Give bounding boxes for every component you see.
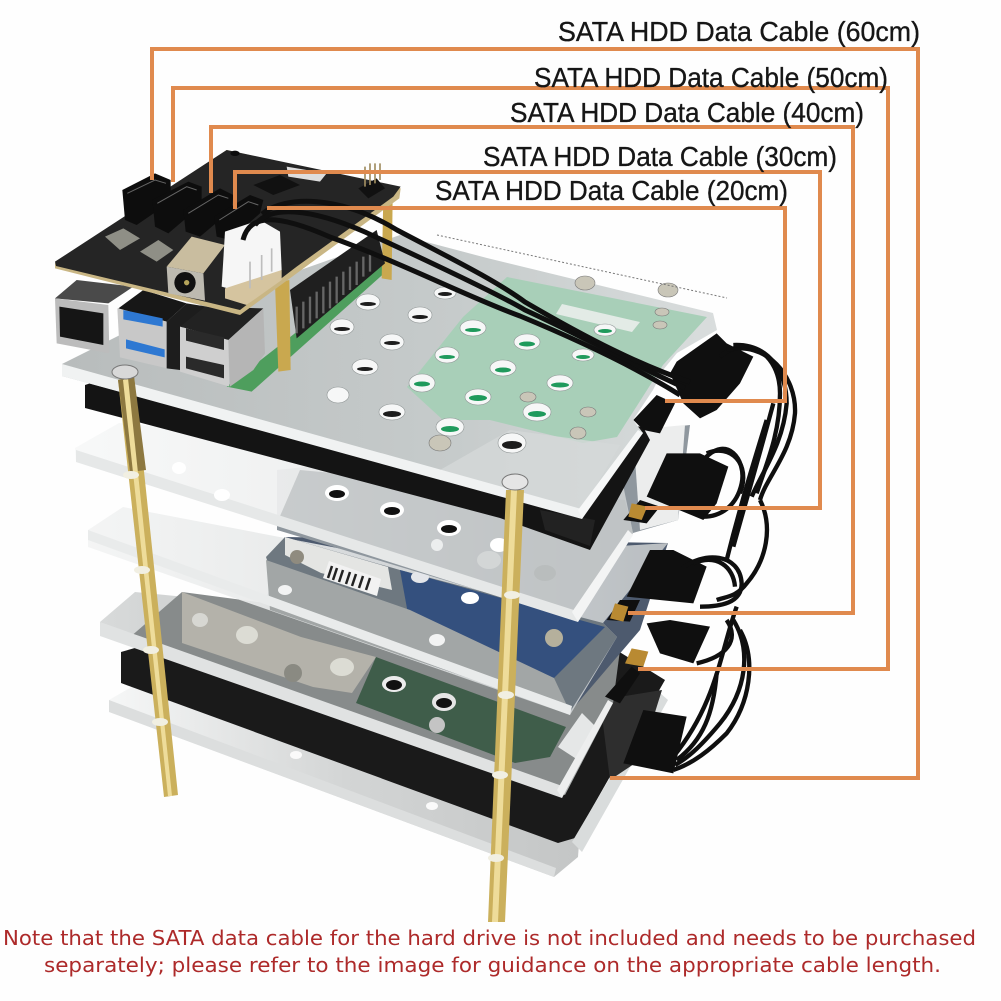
plate 2 [75,423,633,622]
label 20cm: SATA HDD Data Cable (20cm) [435,175,788,206]
plate 3 [88,507,668,715]
white power connector [222,220,282,305]
standoff front [275,280,291,372]
connector 5 [623,710,687,773]
label 40cm: SATA HDD Data Cable (40cm) [510,97,864,128]
purchase note: Note that the SATA data cable for the hard drive is not included and needs to be purchased [3,926,976,950]
drive 3 [266,537,668,712]
line 30cm [235,172,820,508]
connector 1 [633,333,753,433]
plate 5 [109,685,580,877]
ethernet port [55,280,133,353]
Raspberry Pi and SATA HAT board [55,150,401,392]
connector 3 [607,550,707,622]
blue drive board [400,570,605,678]
brass standoff poles [112,365,528,922]
orange callout lines [152,49,918,778]
hard drive stack [62,235,717,877]
label 50cm: SATA HDD Data Cable (50cm) [534,62,888,93]
USB 2 ports [167,303,265,387]
contact pins [610,503,648,667]
GPIO header [290,230,385,338]
label 60cm: SATA HDD Data Cable (60cm) [558,16,920,47]
line 60cm [152,49,918,778]
line 40cm [211,127,853,613]
black power cables [243,201,690,395]
plate holes [327,287,616,453]
QR labels [558,713,596,760]
label with barcode [285,537,392,596]
label 30cm: SATA HDD Data Cable (30cm) [483,141,837,172]
DC power jack [167,237,225,301]
dashed plate outline [437,235,727,298]
drive 2 [277,425,690,620]
Pi board edge [227,262,392,392]
plate 1 [62,235,717,519]
drive connectors and cables [605,333,795,773]
circuit board [356,657,566,763]
standoff rear [382,197,393,280]
plate 4 [100,592,620,798]
drive 4 [121,600,668,852]
line 20cm [267,208,785,401]
purchase note [3,926,976,977]
cable loops [673,345,795,770]
line 50cm [173,88,888,669]
purchase note: separately; please refer to the image for guidance on the appropriate cable length. [44,953,941,977]
drive 1 [85,370,650,550]
cable length labels [435,16,920,206]
plate screws [429,276,678,451]
USB 3 ports [117,290,187,368]
connector 4 [605,620,710,703]
metal bracket [182,592,376,693]
connector 2 [623,453,728,523]
SATA sockets [122,173,263,240]
HAT board [55,150,401,315]
green drive board seen through plate [407,277,707,443]
inductors [105,228,173,262]
